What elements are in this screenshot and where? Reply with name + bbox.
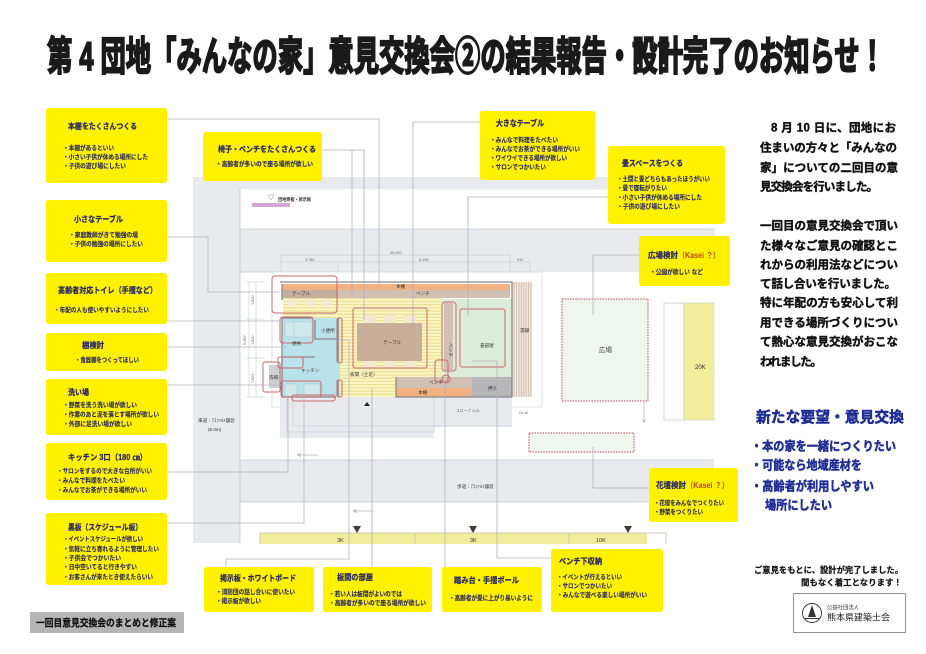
panel: tatami space: [608, 146, 725, 224]
red markup outlines: [263, 276, 505, 401]
dimension lines: [243, 251, 530, 415]
panel bullets: [329, 589, 426, 607]
panel bullets: ・日中空いてると行きやすい: [63, 562, 137, 571]
panel bullets: ・外部に足洗い場が欲しい: [63, 419, 132, 428]
panel: washing area: [46, 379, 167, 435]
panel bullets: [557, 572, 647, 599]
panel bullet: ・高齢者が畳に上がり易いように: [449, 593, 533, 602]
closet: [472, 377, 512, 397]
panel bullets: ・畳で寝転がりたい: [617, 183, 667, 192]
panel heading: 広場検討: [648, 250, 678, 260]
dimension lines: 10,920: [390, 251, 402, 255]
report text: 用できる場所づくりについ: [760, 316, 898, 330]
dimension lines: 5,460: [243, 335, 247, 345]
report text: [760, 120, 898, 368]
panel: accessible toilet: [46, 273, 167, 324]
panel bullet: ・高齢者が多いので座る場所が欲しい: [216, 159, 313, 168]
parking strip: 3K: [470, 538, 477, 544]
new requests list: ・高齢者が利用しやすい: [751, 478, 874, 494]
panel heading: ベンチ下収納: [559, 556, 602, 566]
panel heading: 棚検討: [82, 340, 104, 350]
dimension lines: スロープ 1/18: [456, 408, 479, 413]
road label: (6.0m): [208, 427, 222, 432]
striped floor: [283, 298, 442, 397]
report text: 特に年配の方も安心して利: [760, 296, 898, 310]
plaza: 広場: [599, 345, 612, 354]
panel heading: 椅子・ベンチをたくさんつくる: [218, 144, 316, 154]
closing note: 間もなく着工となります！: [801, 578, 902, 588]
report text: 見交換会を行いました。: [760, 180, 878, 194]
chairs: [288, 299, 416, 368]
organisation logo: [794, 594, 906, 632]
panel: under-bench storage: [551, 549, 663, 612]
report text: て話し合いを行いました。: [760, 276, 896, 290]
panel bullets: [63, 400, 159, 428]
kitchen counters: [285, 322, 320, 396]
room labels: 濡縁: [520, 327, 530, 334]
panel bullets: ・サロンをするので大きな台所がいい: [57, 466, 152, 475]
panel heading: 高齢者対応トイレ（手摺など）: [58, 285, 157, 295]
flower bed: [529, 433, 634, 452]
dimension lines: 6,195: [419, 258, 429, 262]
parking strip: [260, 533, 666, 544]
panel bullets: ・花壇をみんなでつくりたい: [654, 498, 724, 507]
room labels: 本棚: [418, 389, 428, 396]
panel heading: 本棚をたくさんつくる: [68, 121, 137, 131]
side bench: [444, 303, 453, 370]
panel bullets: [57, 466, 152, 494]
panel: big table: [480, 111, 595, 180]
legend: notice board: 団地原板・掲示板: [278, 196, 311, 203]
road label: 車道：ｱｽﾌｧﾙﾄ舗装: [198, 417, 235, 424]
new requests: [751, 408, 904, 512]
panel heading: 掲示板・ホワイトボード: [220, 573, 296, 583]
panel bullets: ・作業のあと泥を落とす場所が欲しい: [63, 410, 159, 418]
panel: notice board: [204, 567, 314, 612]
panel heading: 踏み台・手摺ポール: [454, 575, 519, 585]
flow arrows: [297, 401, 646, 512]
walls: [280, 282, 512, 397]
panel: flower bed review: [649, 468, 738, 522]
room labels: テーブル: [383, 339, 402, 346]
parking 20K: [664, 303, 714, 420]
panel bullets: [63, 534, 159, 581]
footer label: [30, 612, 184, 633]
room labels: ベンチ: [448, 343, 453, 357]
room labels: ベンチ: [429, 380, 443, 385]
new requests list: 場所にしたい: [765, 498, 832, 512]
panel bullets: ・みんなでお茶ができる場所がいい: [490, 144, 580, 153]
panel bullets: ・高齢者が多いので座る場所が欲しい: [329, 598, 426, 607]
panel bullets: ・掲示板が欲しい: [216, 596, 261, 605]
panel heading: 黒板（スケジュール板）: [68, 522, 142, 532]
organisation name: [827, 603, 890, 622]
heading note: （Kasei ？）: [686, 481, 729, 490]
road and pavement bands: [193, 177, 725, 543]
panel bullets: ・子供の遊び場にしたい: [63, 161, 126, 170]
panel bullets: ・みんなで料理をたべたい: [490, 135, 558, 144]
panel bullets: ・気軽に立ち寄れるように管理したい: [63, 544, 159, 553]
panel bullets: ・みんなで料理をたべたい: [57, 476, 125, 484]
panel: wooden floor room: [323, 567, 432, 612]
report text: た様々なご意見の確認とこ: [760, 238, 898, 252]
panel bullets: ・お客さんが来たとき使えたらいい: [63, 572, 153, 581]
connector lines: [167, 119, 649, 567]
room labels: 本棚: [396, 283, 406, 290]
panel bullets: [63, 143, 148, 170]
small table: [282, 290, 338, 298]
plaza: [562, 299, 648, 401]
room labels: 板間（土足）: [350, 371, 378, 378]
panel bullets: [617, 174, 710, 210]
bench strip: [282, 290, 510, 298]
parking strip: 10K: [596, 538, 606, 544]
room labels: 洗場: [269, 374, 279, 381]
entrance marker: [364, 402, 370, 406]
parking 20K: 20K: [695, 365, 706, 371]
deck: [512, 282, 532, 397]
panel: blackboard: [46, 513, 167, 585]
panel heading: 洗い場: [68, 387, 89, 397]
panel bullets: ・イベントが行えるといい: [557, 572, 622, 581]
report text: 住まいの方々と「みんなの: [760, 140, 897, 154]
new requests heading: 新たな要望・意見交換: [756, 408, 904, 426]
panel bullets: ・消防団の話し合いに使いたい: [216, 587, 295, 596]
dimension lines: GL±0: [519, 411, 528, 415]
panel bullets: [69, 230, 143, 248]
report text: 8 月 10 日に、団地にお: [771, 120, 896, 134]
room labels: テーブル: [292, 290, 311, 297]
panel bullets: ・イベントスケジュールが欲しい: [63, 534, 143, 543]
panel bullets: [654, 498, 724, 516]
panel bullets: [216, 587, 295, 605]
legend: notice board: [252, 195, 311, 207]
panel: shelves: [46, 333, 167, 371]
wash area: [269, 365, 281, 388]
report text: れからの利用法などについ: [760, 258, 898, 272]
parking markers: [353, 526, 632, 533]
panel heading: 大きなテーブル: [496, 118, 544, 128]
report text: 一回目の意見交換会で頂い: [760, 218, 898, 232]
panel bullets: ・家庭教師がきて勉強の場: [69, 230, 139, 239]
road label: [198, 417, 235, 432]
panel bullets: ・みんなでお茶ができる場所がいい: [57, 485, 147, 494]
panel heading: 花壇検討: [656, 480, 686, 490]
tatami room: [442, 299, 512, 377]
panel heading: 小さなテーブル: [74, 214, 123, 224]
room labels: 便所: [292, 340, 302, 347]
lower shelf: [396, 388, 472, 397]
panel heading: キッチン 3口（180 ㎝）: [68, 453, 147, 462]
new requests list: ・可能なら地域産材を: [751, 458, 862, 472]
panel bullet: ・食器棚をつくってほしい: [75, 355, 139, 364]
new requests list: [751, 438, 896, 512]
report text: て熱心な意見交換がおこな: [760, 334, 898, 348]
dimension lines: 1,820: [251, 295, 255, 305]
parking strip: 3K: [337, 538, 344, 544]
icon: tower emblem: [802, 604, 822, 622]
top shelf: [282, 284, 510, 290]
central table: [357, 323, 422, 361]
room labels: 押入: [488, 385, 498, 392]
panel bullets: ・ワイワイできる場所が欲しい: [490, 153, 567, 162]
closing note: [754, 565, 903, 588]
panel bullets: ・野菜をつくりたい: [654, 507, 703, 516]
dimension lines: 1,820: [251, 335, 255, 345]
panel heading: 畳スペースをつくる: [622, 159, 683, 168]
organisation name: 熊本県建築士会: [827, 612, 890, 622]
site plan: [193, 177, 725, 544]
report text: 家」についての二回目の意: [760, 160, 898, 174]
panel bullets: ・野菜を洗う洗い場が欲しい: [63, 400, 137, 409]
panel bullets: ・子供会でつかいたい: [63, 553, 121, 562]
closing note: ご意見をもとに、設計が完了しました。: [754, 565, 903, 575]
pavement label: 歩道：ｱｽﾌｧﾙﾄ舗装: [457, 483, 494, 490]
lower bench: [396, 377, 472, 388]
panel: small table: [46, 200, 167, 262]
new requests list: ・本の家を一緒につくりたい: [751, 438, 896, 454]
report text: われました。: [760, 356, 822, 368]
organisation name: 公益社団法人: [827, 603, 860, 611]
room labels: 畳部屋: [480, 343, 494, 349]
panel: bookshelves: [46, 108, 167, 183]
room labels: [269, 283, 530, 396]
panel: chairs and benches: [203, 132, 322, 181]
panel: kitchen: [46, 443, 167, 500]
panel bullets: ・小さい子供が休める場所にした: [63, 152, 148, 161]
panel bullet: ・年配の人も使いやすいようにしたい: [54, 305, 149, 314]
panel bullets: [490, 135, 580, 171]
panel bullets: ・土間と畳どちらもあったほうがいい: [617, 174, 710, 183]
panel: plaza review: [639, 236, 730, 286]
panel bullets: ・小さい子供が休める場所にした: [617, 192, 702, 202]
dimension lines: 1,820: [251, 373, 255, 383]
panel bullets: ・サロンでつかいたい: [557, 582, 612, 590]
floor plan: [263, 276, 532, 401]
panel bullet: ・公園が欲しい など: [650, 267, 704, 276]
plot: [272, 272, 542, 407]
footer label: 一回目意見交換会のまとめと修正案: [36, 616, 176, 630]
panel bullets: ・子供の勉強の場所にしたい: [69, 239, 143, 248]
panel bullets: ・本棚があるといい: [63, 143, 114, 152]
panel bullets: ・サロンでつかいたい: [490, 163, 546, 171]
panel: step and handrail: [442, 567, 542, 612]
dimension lines: 910: [517, 258, 523, 262]
panel bullets: ・子供の遊び場にしたい: [617, 202, 680, 210]
dimension lines: 3,780: [305, 258, 315, 262]
heading note: （Kasei ？）: [678, 251, 720, 260]
room labels: キッチン: [301, 368, 320, 373]
panel heading: 板間の部屋: [337, 572, 373, 582]
kitchen: [282, 318, 340, 397]
panel bullets: ・若い人は板間がよいのでは: [329, 589, 403, 598]
entry approach: [280, 397, 512, 438]
room labels: 小便所: [321, 327, 335, 334]
panel bullets: ・みんなで遊べる楽しい場所がいい: [557, 590, 647, 599]
room labels: ベンチ: [416, 291, 430, 296]
